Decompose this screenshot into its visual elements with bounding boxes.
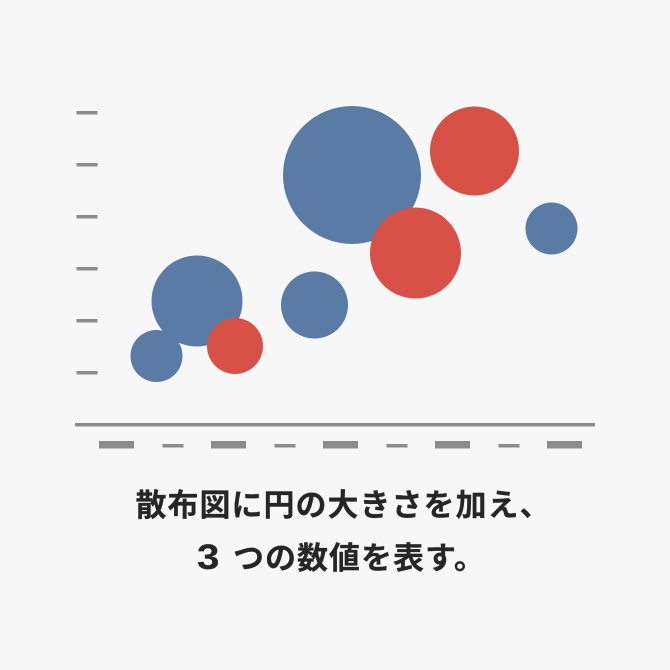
x-axis ticks	[99, 441, 582, 448]
y-axis ticks	[76, 111, 98, 374]
x-axis line	[75, 423, 595, 426]
caption line 2: つの数値を表す。	[233, 541, 486, 576]
caption line 1: 散布図に円の大きさを加え、	[136, 488, 552, 523]
red bubbles	[207, 106, 519, 374]
caption line 2: 3	[197, 538, 219, 577]
blue bubbles	[130, 106, 578, 382]
